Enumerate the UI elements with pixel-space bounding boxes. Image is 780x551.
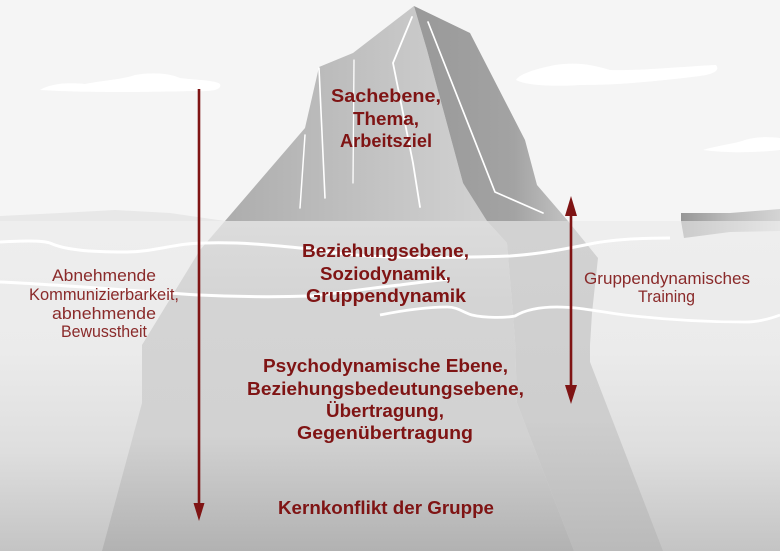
label: abnehmende Bewusstheit: Bewusstheit [61, 323, 147, 341]
waterline 2 [0, 279, 450, 297]
iceberg above water [225, 6, 568, 221]
heading: Kernkonflikt: Kernkonflikt der Gruppe [278, 498, 494, 518]
heading: Sachebene: Sachebene, [331, 86, 441, 106]
heading: Beziehungsebene: Soziodynamik, [320, 264, 451, 284]
label: Gruppendynamisches Training [584, 270, 750, 306]
crevice lines [300, 17, 543, 213]
sky [0, 0, 780, 221]
heading: Psychodynamische Ebene: Psychodynamische Ebene, [263, 356, 508, 376]
waterline 3 [380, 307, 780, 322]
label: abnehmende Bewusstheit: Abnehmende [52, 267, 156, 285]
heading: Psychodynamische Ebene [247, 356, 524, 443]
label: Gruppendynamisches Training: Gruppendynamisches [584, 270, 750, 288]
waterline 1 [0, 238, 670, 257]
label: abnehmende Bewusstheit: abnehmende [52, 305, 156, 323]
arrow: abnehmende Bewusstheit [194, 89, 204, 521]
distant ice on the horizon [0, 210, 225, 221]
ice floe right [681, 209, 780, 238]
main underwater mass [102, 221, 574, 551]
iceberg below water [102, 221, 663, 551]
heading: Psychodynamische Ebene: Gegenübertragung [297, 423, 473, 443]
heading: Sachebene: Thema, [353, 109, 419, 129]
cloud: left [40, 73, 220, 92]
heading: Beziehungsebene: Gruppendynamik [306, 286, 467, 306]
heading: Sachebene [331, 86, 441, 151]
sea [0, 221, 780, 551]
underwater shadow side [487, 221, 663, 551]
cloud: far right [703, 137, 780, 152]
heading: Beziehungsebene: Beziehungsebene, [302, 241, 469, 261]
heading: Psychodynamische Ebene: Beziehungsbedeutungsebene, [247, 379, 524, 399]
label: abnehmende Bewusstheit: Kommunizierbarkeit, [29, 286, 179, 304]
arrow: gruppendynamisches Training [565, 196, 577, 404]
heading: Psychodynamische Ebene: Übertragung, [326, 401, 444, 421]
label: abnehmende Bewusstheit [29, 267, 179, 341]
shadow face [414, 6, 568, 221]
cloud: right [516, 64, 717, 86]
light face [225, 6, 490, 221]
heading: Sachebene: Arbeitsziel [340, 131, 432, 151]
heading: Beziehungsebene [302, 241, 469, 306]
label: Gruppendynamisches Training: Training [638, 288, 695, 306]
